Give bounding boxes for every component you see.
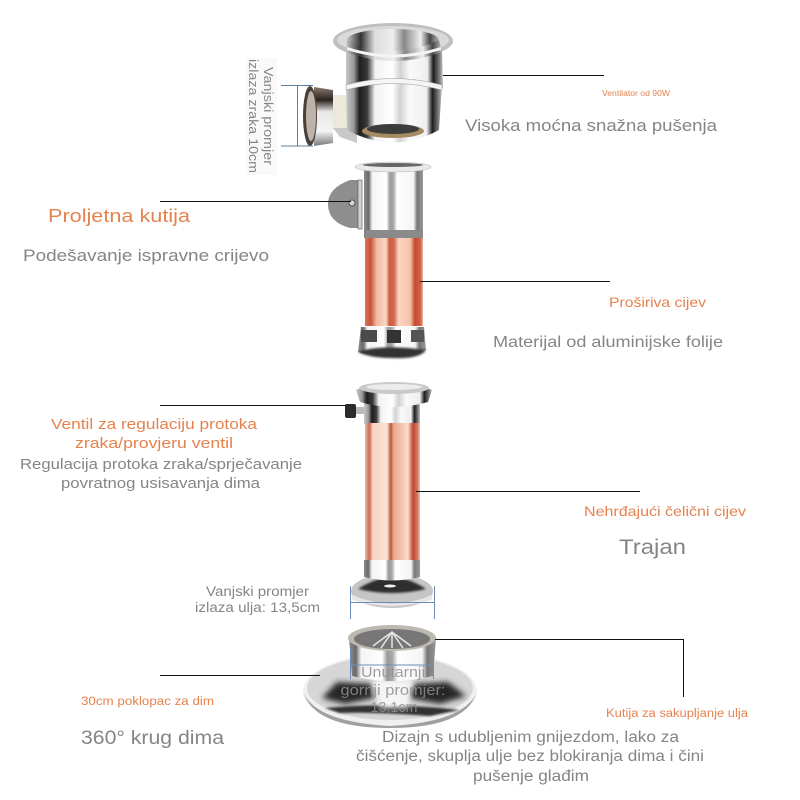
text: inner upper diameter bbox=[340, 665, 446, 716]
text block: ventilator: Ventilator od 90W bbox=[602, 89, 670, 98]
text block: smoke hood: 360° krug dima bbox=[81, 728, 224, 749]
callout: stainless pipe leader line bbox=[416, 490, 640, 492]
text block: smoke hood bbox=[81, 696, 224, 749]
callout: spring box leader line bbox=[160, 200, 351, 202]
text block: air flow valve: zraka/provjeru ventil bbox=[75, 435, 233, 452]
callout: ventilator leader line bbox=[443, 74, 604, 76]
text: air outlet diameter bbox=[246, 58, 277, 175]
text block: air flow valve bbox=[20, 416, 302, 492]
text block: recessed design description: pušenje glađim bbox=[473, 768, 589, 785]
text block: spring box: Proljetna kutija bbox=[48, 205, 191, 226]
text block: stainless steel pipe: Trajan bbox=[619, 536, 686, 559]
text block: stainless steel pipe: Nehrđajući čelični cijev bbox=[584, 503, 746, 519]
text block: recessed design description: Dizajn s udubljenim gnijezdom, lako za bbox=[382, 729, 679, 746]
text block: expandable pipe: Materijal od aluminijske folije bbox=[493, 334, 723, 351]
text block: spring box bbox=[23, 205, 269, 265]
text block: recessed design description bbox=[356, 729, 704, 785]
text: air outlet diameter: Vanjski promjer bbox=[261, 67, 276, 166]
icon: smoke hood bbox=[303, 654, 477, 728]
text: oil outlet diameter: Vanjski promjer bbox=[206, 584, 310, 599]
icon: valve pipe with stainless tube bbox=[345, 382, 433, 608]
text block: ventilator: Visoka moćna snažna pušenja bbox=[465, 116, 718, 135]
callout: hood leader line bbox=[160, 674, 320, 676]
icon: spring box with expandable hose bbox=[328, 162, 431, 358]
text block: expandable pipe: Proširiva cijev bbox=[609, 294, 706, 310]
icon: oil collection cup bbox=[348, 625, 436, 681]
text block: air flow valve: Regulacija protoka zraka/sprječavanje bbox=[20, 456, 302, 473]
text block: oil collection box: Kutija za sakupljanje ulja bbox=[606, 708, 749, 720]
text block: stainless steel pipe bbox=[584, 503, 746, 559]
callout: expandable pipe leader line bbox=[420, 280, 610, 282]
icon: ventilator fan housing bbox=[303, 23, 453, 146]
text block: recessed design description: čišćenje, skuplja ulje bez blokiranja dima i čini bbox=[356, 748, 704, 765]
text block: smoke hood: 30cm poklopac za dim bbox=[81, 696, 214, 708]
text: inner upper diameter: 13,1cm bbox=[370, 700, 418, 716]
text block: air flow valve: povratnog usisavanja dima bbox=[61, 475, 261, 492]
text block: spring box: Podešavanje ispravne crijevo bbox=[23, 246, 269, 265]
callout: oil box leader line bbox=[435, 640, 684, 697]
icon: oil outlet dimension bracket bbox=[350, 586, 434, 619]
icon: air outlet dimension bracket bbox=[281, 86, 313, 146]
text block: ventilator bbox=[465, 89, 718, 135]
icon: inner diameter dimension bracket bbox=[350, 648, 434, 679]
text: air outlet diameter: izlaza zraka 10cm bbox=[246, 59, 261, 173]
text: inner upper diameter: gornji promjer: bbox=[340, 683, 446, 699]
text: oil outlet diameter bbox=[195, 584, 320, 615]
text block: air flow valve: Ventil za regulaciju protoka bbox=[51, 416, 258, 433]
text: inner upper diameter: Unutarnji bbox=[361, 665, 425, 681]
text block: expandable pipe bbox=[493, 294, 723, 351]
callout: valve leader line bbox=[160, 404, 346, 406]
text: oil outlet diameter: izlaza ulja: 13,5cm bbox=[195, 600, 320, 615]
